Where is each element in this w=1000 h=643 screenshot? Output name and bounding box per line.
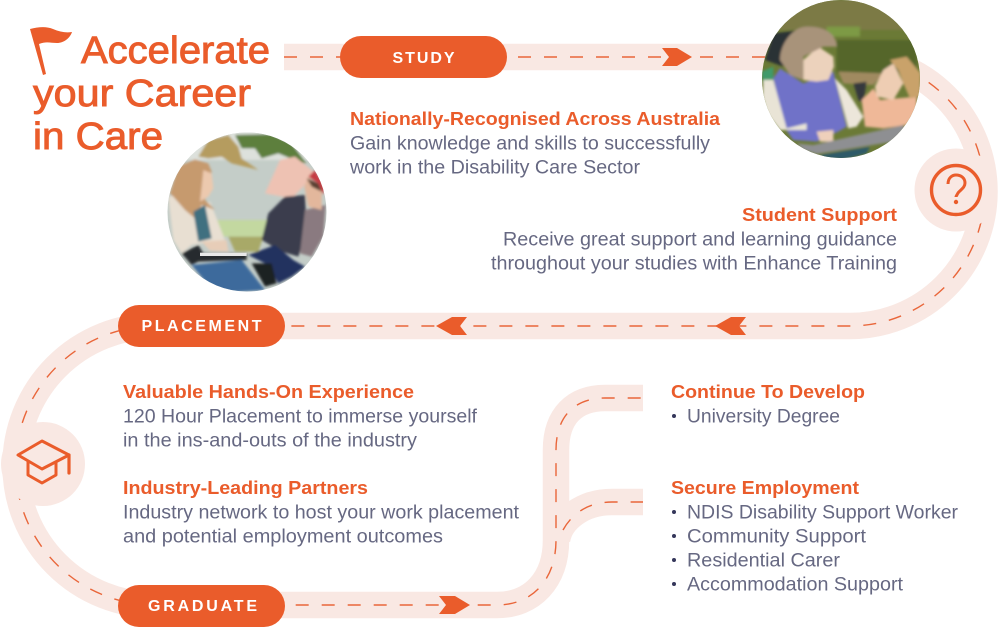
text block: nationally recognised (349, 108, 721, 178)
text block: secure employment: Secure Employment (671, 477, 859, 498)
text block: student support (491, 204, 897, 274)
text block: secure employment: Accommodation Support (687, 574, 904, 596)
text block: secure employment: Community Support (687, 526, 867, 548)
text block: nationally recognised: Gain knowledge and skills to successfully (350, 134, 711, 154)
photo: student and companion on a bench (165, 130, 330, 295)
photo: child with carer outdoors (760, 0, 925, 160)
pill: graduate (118, 585, 285, 627)
text block: secure employment: NDIS Disability Support Worker (687, 502, 959, 524)
text block: student support: Receive great support and learning guidance (503, 230, 897, 250)
text block: industry partners: and potential employment outcomes (123, 526, 443, 548)
text block: hands-on experience: 120 Hour Placement to immerse yourself (123, 406, 478, 428)
pill: study: STUDY (392, 50, 455, 67)
icon: graduation cap (1, 422, 85, 506)
title: Accelerate (81, 30, 270, 72)
arrow: top road (662, 48, 692, 66)
arrow: lower road left (436, 317, 467, 335)
pill: placement (118, 305, 285, 347)
text block: hands-on experience: Valuable Hands-On Experience (123, 381, 414, 402)
arrow: lower road right (715, 317, 746, 335)
text block: industry partners (123, 477, 520, 548)
arrow: graduate road (439, 596, 470, 614)
text block: continue to develop (671, 381, 865, 428)
text block: secure employment: Residential Carer (687, 550, 841, 572)
icon: flag (30, 27, 72, 75)
text block: student support: Student Support (742, 204, 897, 225)
text block: student support: throughout your studies with Enhance Training (491, 254, 897, 274)
text block: continue to develop: Continue To Develop (671, 381, 865, 402)
title: in Care (33, 116, 163, 158)
text block: continue to develop: University Degree (687, 406, 840, 428)
text block: hands-on experience: in the ins-and-outs of the industry (123, 430, 418, 452)
text block: industry partners: Industry-Leading Partners (123, 477, 368, 498)
title: your Career (33, 73, 251, 115)
text block: nationally recognised: Nationally-Recognised Across Australia (350, 108, 721, 129)
text block: nationally recognised: work in the Disability Care Sector (349, 158, 641, 178)
pill: placement: PLACEMENT (142, 318, 262, 335)
pill: graduate: GRADUATE (148, 598, 257, 615)
text block: industry partners: Industry network to host your work placement (123, 502, 520, 524)
icon: question mark support (914, 148, 998, 232)
text block: hands-on experience (123, 381, 478, 452)
title (33, 30, 270, 158)
pill: study (340, 36, 507, 78)
text block: secure employment (671, 477, 959, 596)
